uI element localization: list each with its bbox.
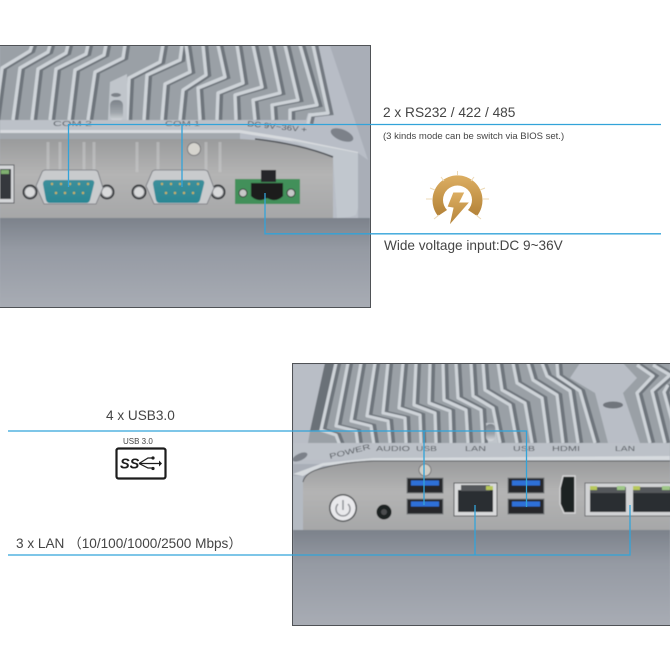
connector: COM 2 serial port bbox=[22, 170, 114, 204]
heading: serial ports: 2 x RS232 / 422 / 485 bbox=[383, 105, 516, 120]
port labels row: USB bbox=[513, 444, 535, 453]
panel: USB and LAN photo bbox=[291, 363, 670, 626]
heading: LAN ports: 3 x LAN （10/100/1000/2500 Mbps） bbox=[16, 536, 242, 551]
port: HDMI bbox=[560, 476, 575, 513]
chassis mounting hole bbox=[330, 128, 354, 142]
connector: COM 1 serial port bbox=[132, 170, 226, 204]
port: USB 3.0 right stack bbox=[508, 478, 544, 514]
port: double LAN block bbox=[585, 483, 670, 516]
port labels row: LAN bbox=[465, 444, 486, 453]
label: COM 1: COM 1 bbox=[165, 119, 200, 128]
port: USB 3.0 left stack bbox=[407, 478, 443, 514]
panel: serial and power photo bbox=[0, 45, 370, 308]
label: COM 2: COM 2 bbox=[53, 119, 92, 128]
icon: gold voltage gauge bbox=[426, 171, 489, 226]
chassis screw bbox=[188, 142, 200, 156]
callout lines: serial and power bbox=[68, 124, 661, 234]
icon: USB 3.0 SuperSpeed badge bbox=[116, 437, 166, 478]
heading: USB ports: 4 x USB3.0 bbox=[106, 408, 175, 423]
port labels row: USB bbox=[416, 444, 437, 453]
port labels row: LAN bbox=[615, 444, 635, 453]
port labels row: AUDIO bbox=[376, 444, 410, 453]
callout lines: USB and LAN bbox=[8, 431, 630, 555]
port: audio jack bbox=[376, 504, 392, 520]
port labels row bbox=[329, 444, 635, 460]
heading: wide voltage: Wide voltage input:DC 9~36V bbox=[384, 238, 563, 253]
port labels row: HDMI bbox=[552, 444, 580, 453]
connector: green power terminal bbox=[235, 170, 300, 204]
note: BIOS mode: (3 kinds mode can be switch via BIOS set.) bbox=[383, 131, 564, 142]
chassis mounting hole bbox=[293, 452, 308, 462]
icon: USB 3.0 SuperSpeed badge: SS bbox=[120, 456, 140, 472]
chassis screw bbox=[419, 464, 431, 476]
connector: LAN edge bbox=[0, 165, 14, 203]
port labels row: POWER bbox=[328, 442, 372, 461]
icon: USB 3.0 SuperSpeed badge: USB 3.0 bbox=[123, 437, 153, 446]
button: power bbox=[329, 494, 357, 522]
label: DC 9V~36V: DC 9V~36V + bbox=[247, 119, 308, 134]
port: RJ45 LAN centre bbox=[454, 483, 497, 516]
